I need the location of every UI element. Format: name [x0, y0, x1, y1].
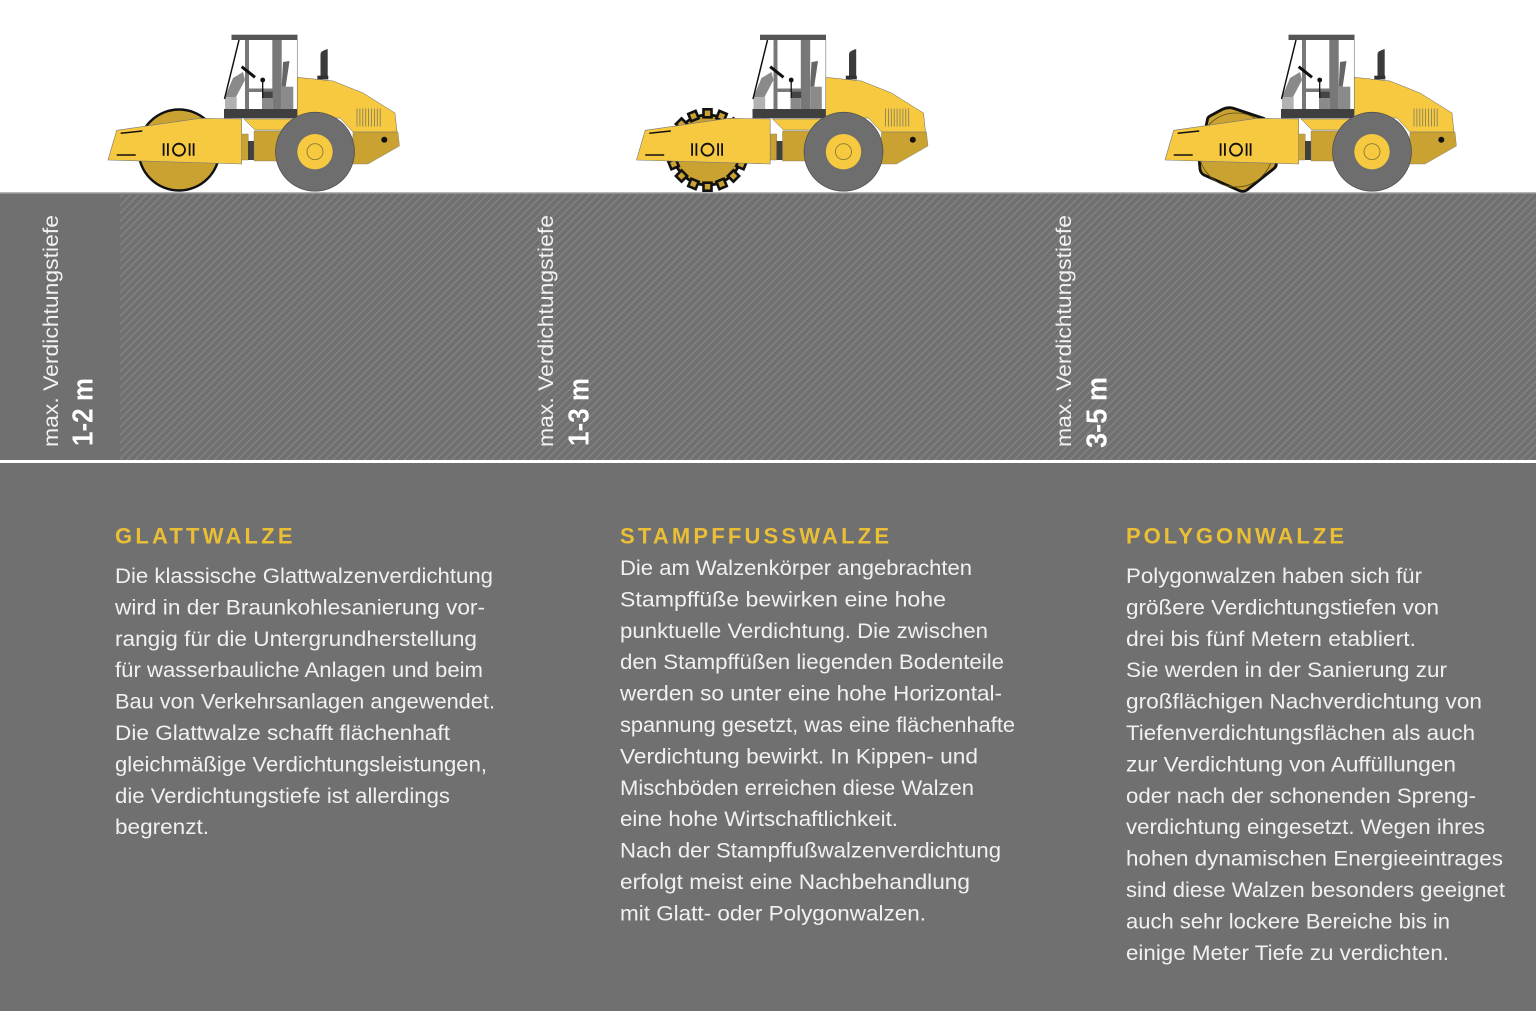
depth label: 1-3 m [535, 215, 596, 447]
text block: Polygonwalze: oder nach der schonenden Spreng- [1126, 784, 1476, 808]
heading: Polygonwalze: POLYGONWALZE [1126, 524, 1344, 548]
depth label: 1-3 m: 1-3 m [564, 378, 596, 446]
machine body [1281, 35, 1456, 191]
depth label: 3-5 m: 3-5 m [1082, 377, 1114, 448]
roller: polygon drum [1165, 35, 1456, 191]
text block: Polygonwalze: einige Meter Tiefe zu verdichten. [1126, 941, 1449, 965]
text block: Stampffusswalze: den Stampffüßen liegenden Bodenteile [620, 650, 1004, 674]
text block: Glattwalze: Bau von Verkehrsanlagen angewendet. [115, 690, 495, 714]
text block: Polygonwalze [1126, 564, 1505, 965]
text block: Stampffusswalze: spannung gesetzt, was eine flächenhafte [620, 713, 1015, 737]
text block: Stampffusswalze: werden so unter eine hohe Horizontal- [619, 682, 1002, 706]
text block: Stampffusswalze: eine hohe Wirtschaftlichkeit. [620, 807, 898, 831]
text block: Glattwalze: Die Glattwalze schafft flächenhaft [115, 721, 450, 745]
divider line [0, 460, 1536, 463]
depth label: 1-2 m: max. Verdichtungstiefe [40, 215, 63, 447]
text block: Polygonwalze: großflächigen Nachverdichtung von [1126, 690, 1482, 714]
text block: Polygonwalze: größere Verdichtungstiefen von [1126, 595, 1439, 619]
machine body [752, 35, 928, 191]
machine body [224, 35, 400, 191]
front frame [1165, 118, 1299, 164]
text block: Glattwalze: die Verdichtungstiefe ist allerdings [115, 784, 450, 808]
text block: Glattwalze: wird in der Braunkohlesanierung vor- [114, 595, 485, 619]
depth label: 3-5 m: max. Verdichtungstiefe [1053, 215, 1076, 447]
front frame [108, 118, 242, 164]
drum: sheepsfoot [667, 109, 748, 191]
text block: Glattwalze: für wasserbauliche Anlagen und beim [115, 658, 483, 682]
text block: Stampffusswalze: Stampffüße bewirken eine hohe [620, 587, 946, 611]
text block: Stampffusswalze: punktuelle Verdichtung. Die zwischen [620, 619, 988, 643]
text block: Stampffusswalze: Die am Walzenkörper angebrachten [620, 556, 972, 580]
text block: Stampffusswalze [619, 556, 1015, 925]
text block: Stampffusswalze: Verdichtung bewirkt. In Kippen- und [620, 744, 978, 768]
text block: Stampffusswalze: Nach der Stampffußwalzenverdichtung [620, 839, 1001, 863]
text block: Polygonwalze: sind diese Walzen besonders geeignet [1126, 878, 1505, 902]
depth label: 1-2 m [40, 215, 100, 447]
text block: Glattwalze [114, 564, 495, 839]
ground band [0, 192, 1536, 460]
text block: Polygonwalze: drei bis fünf Metern etabliert. [1126, 627, 1416, 651]
text block: Stampffusswalze: Mischböden erreichen diese Walzen [620, 776, 974, 800]
text block: Polygonwalze: verdichtung eingesetzt. Wegen ihres [1126, 815, 1485, 839]
text block: Glattwalze: gleichmäßige Verdichtungsleistungen, [115, 752, 487, 776]
text block: Glattwalze: rangig für die Untergrundherstellung [115, 627, 477, 651]
text block: Glattwalze: Die klassische Glattwalzenverdichtung [115, 564, 493, 588]
depth label: 1-3 m: max. Verdichtungstiefe [535, 215, 558, 447]
text block: Glattwalze: begrenzt. [115, 815, 209, 839]
text block: Stampffusswalze: mit Glatt- oder Polygonwalzen. [620, 901, 926, 925]
text block: Polygonwalze: auch sehr lockere Bereiche bis in [1126, 909, 1450, 933]
heading: Stampffusswalze: STAMPFFUSSWALZE [620, 524, 889, 548]
drum: polygon [1199, 108, 1276, 191]
text block: Polygonwalze: Sie werden in der Sanierung zur [1126, 658, 1447, 682]
text block: Stampffusswalze: erfolgt meist eine Nachbehandlung [620, 870, 970, 894]
front frame [636, 118, 770, 164]
roller: sheepsfoot drum [636, 35, 928, 191]
roller: smooth drum [108, 35, 400, 191]
heading: Glattwalze: GLATTWALZE [115, 524, 292, 548]
text block: Polygonwalze: hohen dynamischen Energieeintrages [1126, 847, 1503, 871]
text block: Polygonwalze: Polygonwalzen haben sich für [1126, 564, 1422, 588]
depth label: 1-2 m: 1-2 m [68, 378, 100, 446]
drum: smooth [138, 110, 220, 190]
depth label: 3-5 m [1053, 215, 1114, 448]
text block: Polygonwalze: Tiefenverdichtungsflächen als auch [1126, 721, 1475, 745]
text block: Polygonwalze: zur Verdichtung von Auffüllungen [1126, 752, 1456, 776]
text panel background [0, 463, 1536, 1011]
